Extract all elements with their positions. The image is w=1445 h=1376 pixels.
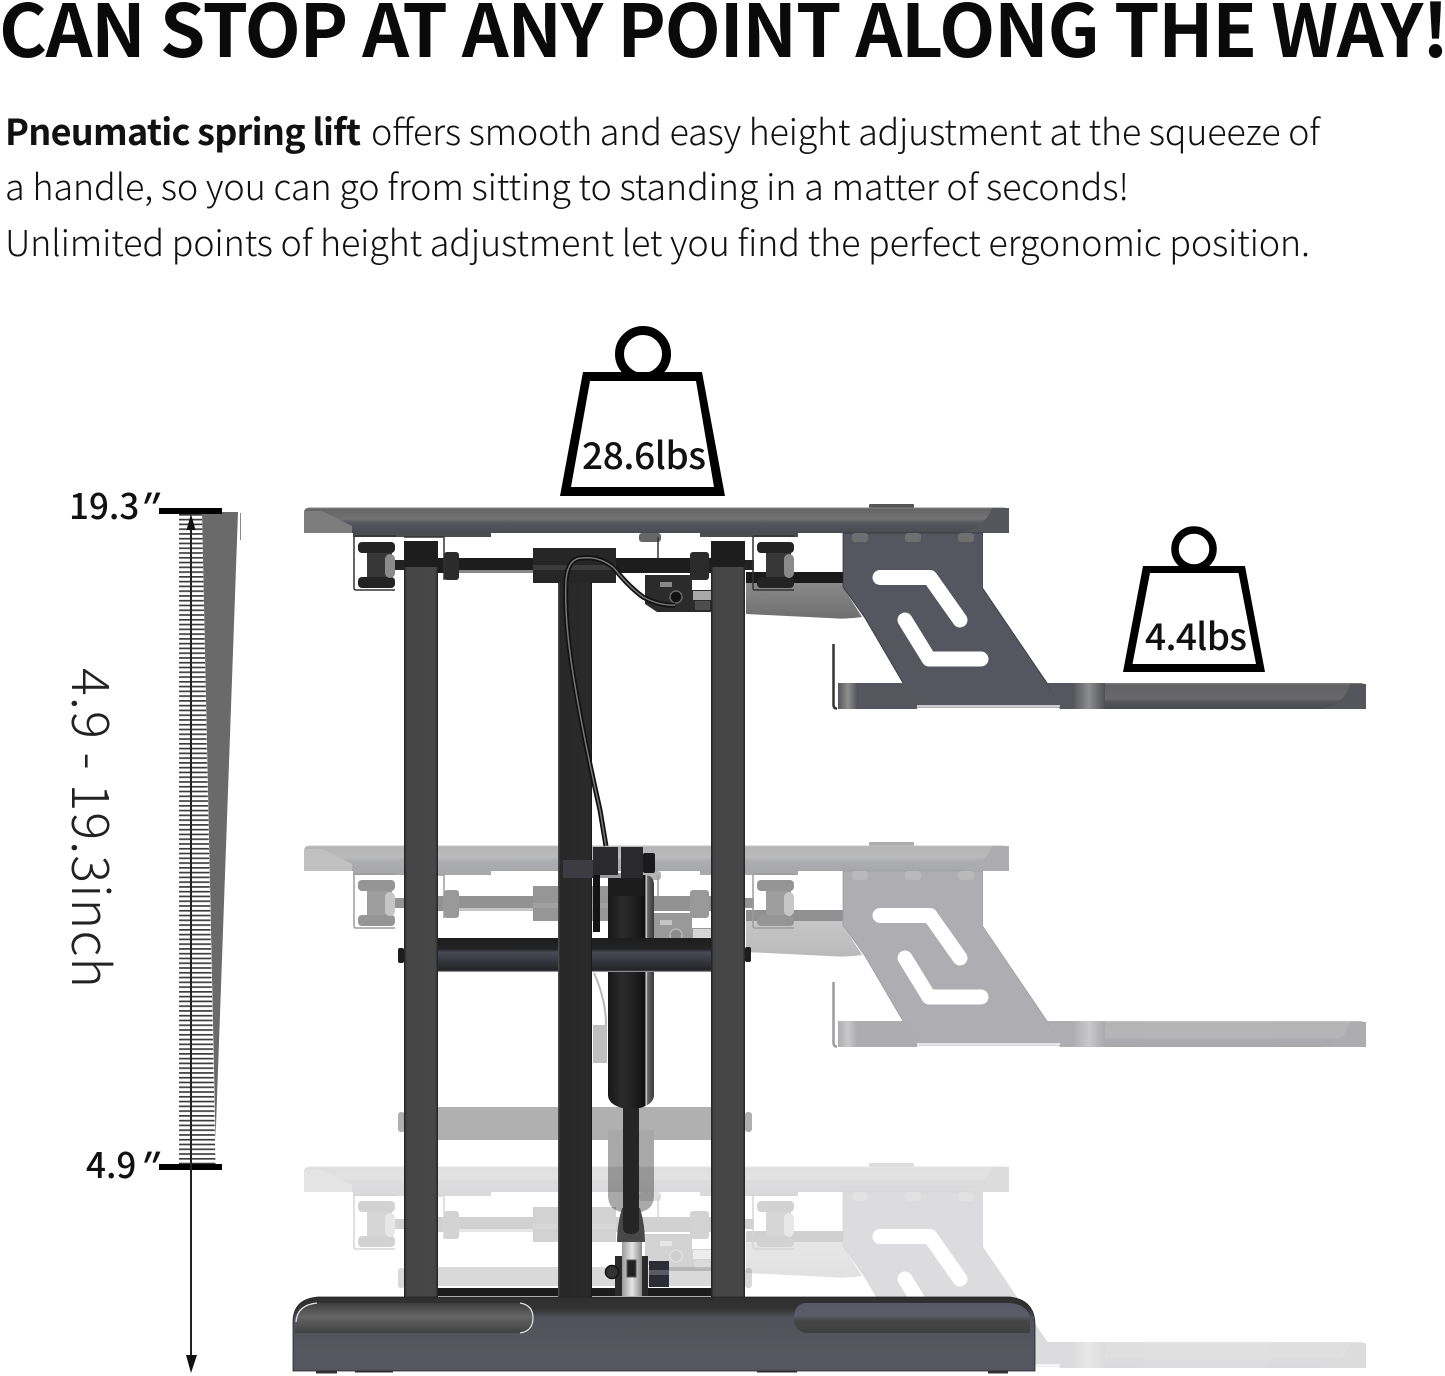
wedge edge mark (240, 513, 241, 540)
range label rotated: 4.9 - 19.3inch (57, 668, 132, 988)
gas spring lower fitting (606, 1200, 669, 1296)
weight icon (560, 330, 725, 496)
crossbar bolts (398, 947, 751, 963)
height scale (57, 478, 241, 1373)
left handle highlights (296, 1303, 533, 1333)
weight icon (1123, 530, 1265, 672)
base body (293, 1297, 1035, 1371)
middle ghost crossbar and parts (398, 973, 752, 1212)
description line 3: Unlimited points of height adjustment let you find the perfect ergonomic position. (5, 215, 1310, 267)
center column (558, 583, 592, 1297)
middle ghost desk position (304, 842, 1366, 1047)
left handle recess (295, 1303, 533, 1333)
right handle recess (794, 1303, 1030, 1333)
bottom limit bar (159, 1164, 222, 1170)
weight 28.6lbs (560, 330, 725, 496)
base feet (316, 1370, 1008, 1374)
top desk position (304, 504, 1366, 709)
label 4.9 inch: 4.9 (86, 1138, 136, 1189)
right column (711, 541, 745, 1297)
description text block (5, 104, 1321, 267)
support frame (398, 541, 751, 1297)
bottom frame bar (438, 1288, 711, 1296)
label 19.3 inch: 19.3 (69, 479, 139, 530)
top limit bar (159, 508, 222, 514)
height adjustment cable (566, 558, 675, 846)
clamp pin (563, 860, 593, 878)
double arrow axis (186, 514, 197, 1373)
left column (404, 541, 438, 1297)
label 19.3 inch: ″ (136, 478, 161, 533)
weight label: 28.6lbs (582, 426, 706, 480)
clamp plate (593, 847, 655, 932)
description line 2: a handle, so you can go from sitting to standing in a matter of seconds! (5, 159, 1129, 211)
crossbar (438, 938, 711, 972)
gas spring cylinder (608, 875, 654, 1233)
base (293, 1297, 1035, 1374)
scale wedge (202, 512, 238, 1140)
label 4.9 inch: ″ (136, 1137, 161, 1192)
lowest ghost crossbar (398, 1267, 752, 1288)
description line 1: offers smooth and easy height adjustment at the squeeze of (371, 104, 1321, 156)
bold lead-in: Pneumatic spring lift (5, 104, 361, 156)
scale ticks (179, 514, 219, 1164)
weight label: 4.4lbs (1145, 607, 1247, 661)
lowest ghost desk position (304, 1163, 1366, 1368)
weight 4.4lbs (1123, 530, 1265, 672)
